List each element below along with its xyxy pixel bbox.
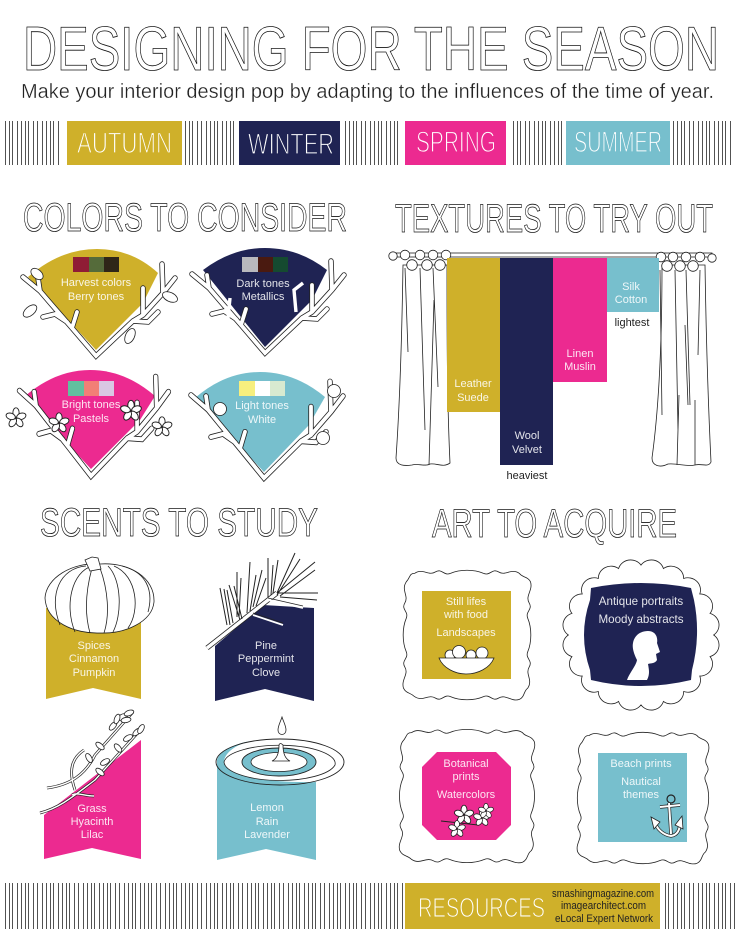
color shield: spring: Bright tones <box>62 399 121 411</box>
scent banner: winter pine: Peppermint <box>238 653 294 665</box>
bar: wool velvet: Wool <box>515 430 539 442</box>
subtitle: Make your interior design pop by adapting to the influences of the time of year. <box>21 81 714 103</box>
scent banner: autumn pumpkin <box>45 557 154 699</box>
art frame: summer beach: Beach prints <box>610 758 672 770</box>
scent banner: winter pine: Pine <box>255 640 277 652</box>
art frame: summer beach <box>577 732 709 864</box>
color shield: winter <box>192 248 344 353</box>
resources links: smashingmagazine.com <box>552 888 654 900</box>
art frame: summer beach: themes <box>623 789 660 801</box>
color shield: spring: Pastels <box>73 413 110 425</box>
bar: linen muslin: Linen <box>567 348 593 360</box>
art frame: autumn still life <box>403 570 531 700</box>
art frame: summer beach: Nautical <box>621 776 661 788</box>
art frame: spring botanical: Botanical <box>443 758 489 770</box>
color shield: summer: White <box>248 414 276 426</box>
art frame: spring botanical <box>399 729 535 863</box>
season: winter <box>239 121 340 165</box>
season: autumn <box>67 121 182 165</box>
art frame: spring botanical: prints <box>453 771 480 783</box>
panel: art <box>399 560 719 864</box>
art frame: winter portrait: Moody abstracts <box>598 613 684 626</box>
panel: scents <box>40 553 344 860</box>
scent banner: autumn pumpkin: Spices <box>77 640 111 652</box>
resources label: RESOURCES <box>418 892 545 923</box>
art frame: autumn still life: Still lifes <box>446 596 487 608</box>
heading: colors to consider: COLORS TO CONSIDER <box>23 196 347 240</box>
bar: wool velvet <box>500 258 553 465</box>
bar: silk cotton <box>607 258 659 312</box>
bar: leather suede: Suede <box>457 392 489 404</box>
bar: linen muslin: Muslin <box>564 361 596 373</box>
resources links: imagearchitect.com <box>561 900 646 912</box>
icon: fruit bowl <box>439 646 494 674</box>
art frame: autumn still life: Landscapes <box>436 627 496 639</box>
bar: silk cotton: Silk <box>622 281 640 293</box>
right curtain <box>652 265 711 466</box>
color shield: summer <box>191 372 343 478</box>
season: autumn: AUTUMN <box>77 127 172 160</box>
scent banner: spring lavender: Hyacinth <box>71 816 113 828</box>
footer resources bar <box>5 883 736 929</box>
icon: pumpkin <box>45 557 154 633</box>
scent banner: summer candle: Rain <box>256 816 278 828</box>
label: lightest: lightest <box>615 317 649 329</box>
scent banner: winter pine <box>207 553 318 701</box>
icon: blossom sprig <box>441 803 494 837</box>
icon: pine branch <box>207 553 318 648</box>
art frame: spring botanical: Watercolors <box>437 789 496 801</box>
panel: textures curtain chart <box>389 250 716 482</box>
art frame: winter portrait: Antique portraits <box>599 595 683 608</box>
scent banner: autumn pumpkin: Pumpkin <box>73 667 115 679</box>
icon: water ripple and drop <box>216 717 344 785</box>
color shield: autumn: Berry tones <box>68 291 125 303</box>
left curtain <box>396 265 450 465</box>
season: spring: SPRING <box>416 126 496 159</box>
season: spring <box>405 121 506 165</box>
color shield: autumn: Harvest colors <box>61 277 132 289</box>
color shield: winter: Metallics <box>242 291 285 303</box>
scent banner: spring lavender <box>40 709 146 859</box>
color shield: spring <box>5 370 173 476</box>
label: heaviest: heaviest <box>507 470 547 482</box>
scent banner: summer candle: Lavender <box>244 829 290 841</box>
scent banner: autumn pumpkin: Cinnamon <box>69 653 119 665</box>
scent banner: spring lavender: Lilac <box>81 829 104 841</box>
bar: wool velvet: Velvet <box>512 444 542 456</box>
art frame: winter portrait <box>563 560 719 710</box>
color shield: autumn <box>21 249 179 356</box>
icon: cameo silhouette <box>627 631 660 680</box>
season: summer <box>566 121 670 165</box>
resources links: eLocal Expert Network <box>555 913 654 925</box>
bar: linen muslin <box>553 258 607 382</box>
color shield: summer: Light tones <box>235 400 289 412</box>
bar: leather suede <box>447 258 500 412</box>
scent banner: summer candle: Lemon <box>250 802 284 814</box>
resources links <box>552 888 654 925</box>
scent banner: summer candle <box>216 717 344 860</box>
panel: colors to consider <box>5 248 344 478</box>
scent banner: spring lavender: Grass <box>77 803 107 815</box>
season bar <box>5 121 732 165</box>
bar: leather suede: Leather <box>454 378 492 390</box>
art frame: autumn still life: with food <box>443 609 488 621</box>
icon: lavender sprigs <box>40 709 146 813</box>
color shield: winter: Dark tones <box>236 278 290 290</box>
icon: anchor <box>651 795 683 836</box>
bar: silk cotton: Cotton <box>615 294 647 306</box>
heading: scents to study: SCENTS TO STUDY <box>40 501 318 545</box>
scent banner: winter pine: Clove <box>252 667 280 679</box>
curtain rod and rings <box>389 250 716 271</box>
season: summer: SUMMER <box>574 126 662 159</box>
season: winter: WINTER <box>248 128 334 161</box>
